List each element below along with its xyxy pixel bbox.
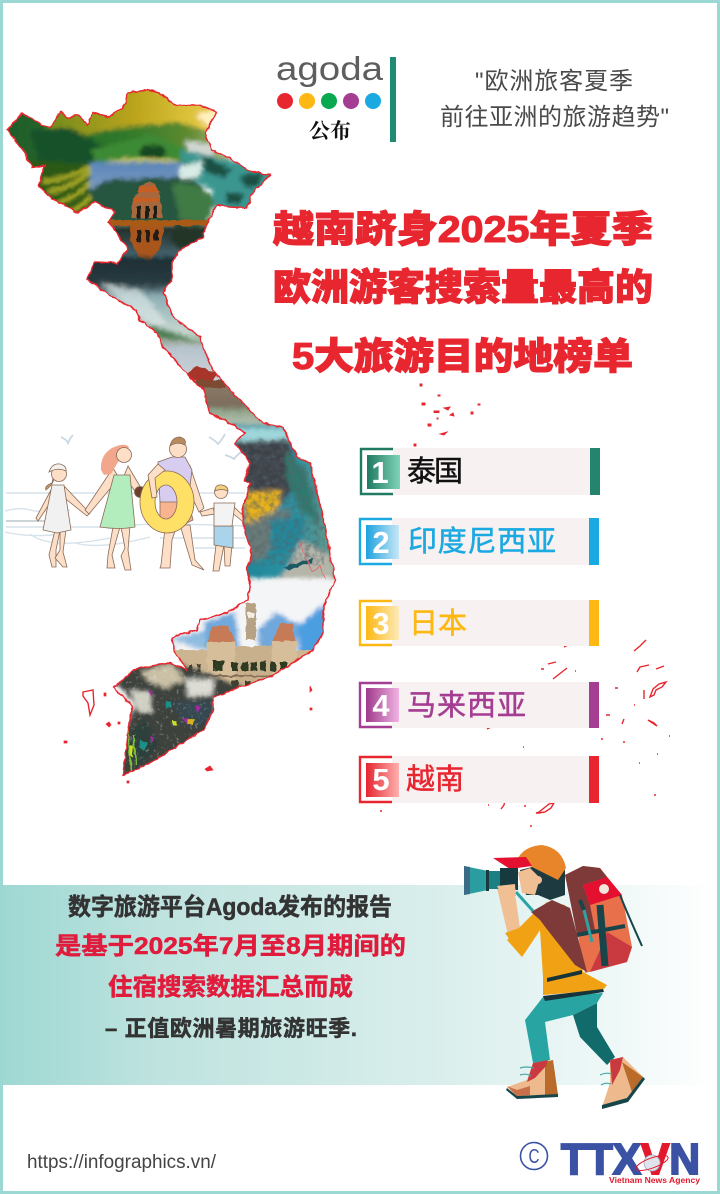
head and hair: [520, 865, 565, 900]
subtitle quote: "欧洲旅客夏季: [475, 68, 633, 95]
orange cap: [518, 845, 566, 880]
subtitle quote: [440, 68, 669, 131]
bottom information band background: [3, 885, 717, 1085]
main title: 越南跻身2025年夏季: [273, 209, 653, 250]
rank 3 Japan: 3: [372, 606, 390, 641]
boats and colours: [128, 730, 137, 772]
report description text: – 正值欧洲暑期旅游旺季.: [105, 1016, 357, 1041]
report description text: 数字旅游平台Agoda发布的报告: [68, 893, 392, 921]
ha long bay: [180, 150, 280, 212]
main title: [273, 209, 653, 377]
report description text: 是基于2025年7月至8月期间的: [55, 933, 406, 960]
rank 3 Japan: [360, 600, 599, 646]
rank 2 Indonesia: [360, 518, 599, 565]
published label: 公布: [309, 119, 351, 143]
waterfall: [88, 254, 202, 347]
islands: Hoang Sa archipelago: [414, 384, 480, 446]
ranking list: [360, 448, 600, 803]
girl: [36, 464, 90, 567]
red brim: [493, 857, 532, 869]
woman: [85, 445, 146, 570]
palace of hue: [185, 366, 225, 388]
boy: [200, 485, 250, 571]
islands: Truong Sa archipelago: [380, 640, 670, 826]
rice terraces: [32, 160, 100, 212]
sea waves: [5, 493, 245, 548]
reflection: [113, 225, 206, 262]
rank 5 Vietnam: [360, 756, 599, 803]
subtitle quote: 前往亚洲的旅游趋势": [440, 104, 669, 131]
lake and sky: [90, 162, 182, 192]
mekong delta market: [115, 660, 245, 774]
report description text: 住宿搜索数据汇总而成: [108, 974, 353, 1001]
front boot: [506, 1060, 558, 1099]
northern mountains: [8, 93, 231, 167]
agoda wordmark: agoda: [276, 50, 384, 87]
rank 4 Malaysia: 马来西亚: [407, 690, 526, 722]
rank 1 Thailand: 泰国: [407, 455, 463, 488]
islands: Phu Quoc and small southern islands: [64, 686, 312, 783]
backpack: [565, 866, 642, 973]
rank 2 Indonesia: 印度尼西亚: [408, 525, 556, 558]
TTXVN wordmark: TTXVN: [561, 1135, 700, 1184]
back leg: [573, 1003, 615, 1065]
main title: 5大旅游目的地榜单: [292, 335, 633, 377]
back boot: [600, 1057, 645, 1109]
camera with telephoto lens: [464, 866, 518, 898]
southern sky: [198, 574, 335, 651]
internal province border: [300, 543, 325, 580]
hue citadel section: [155, 346, 280, 430]
colour dots: [277, 93, 381, 109]
copyright symbol: [520, 1142, 548, 1170]
turtle tower: [109, 182, 207, 262]
source url: https://infographics.vn/: [27, 1152, 217, 1173]
rank 3 Japan: 日本: [409, 607, 467, 640]
traveler with camera illustration: [464, 845, 645, 1109]
TTXVN logo: [561, 1135, 700, 1185]
rank 5 Vietnam: 越南: [406, 763, 464, 796]
camera strap: [516, 892, 533, 911]
jacket: [507, 902, 607, 995]
teal divider bar: [390, 57, 396, 142]
front leg: [525, 993, 603, 1063]
boats: [283, 558, 313, 570]
straps and belt: [531, 900, 587, 972]
main title: 欧洲游客搜索量最高的: [273, 266, 653, 308]
report description text: [55, 893, 406, 1041]
agoda logo: [276, 50, 384, 143]
map of Vietnam filled with photographs: [0, 85, 340, 782]
hoi an section: [225, 425, 340, 590]
ho chi minh city hall: [174, 602, 311, 688]
copyright symbol: C: [528, 1146, 540, 1168]
arm: [497, 886, 520, 935]
globe emblem: [634, 1152, 670, 1174]
rank 1 Thailand: [361, 448, 600, 495]
seagulls: [61, 434, 241, 459]
rank 5 Vietnam: 5: [372, 762, 390, 797]
rank 1 Thailand: 1: [371, 455, 389, 490]
man with swim ring: [140, 437, 204, 570]
rank 4 Malaysia: [360, 682, 599, 728]
family illustration: [5, 434, 250, 571]
rank 2 Indonesia: 2: [372, 525, 390, 560]
rank 4 Malaysia: 4: [372, 688, 390, 723]
agency name: Vietnam News Agency: [609, 1175, 700, 1185]
